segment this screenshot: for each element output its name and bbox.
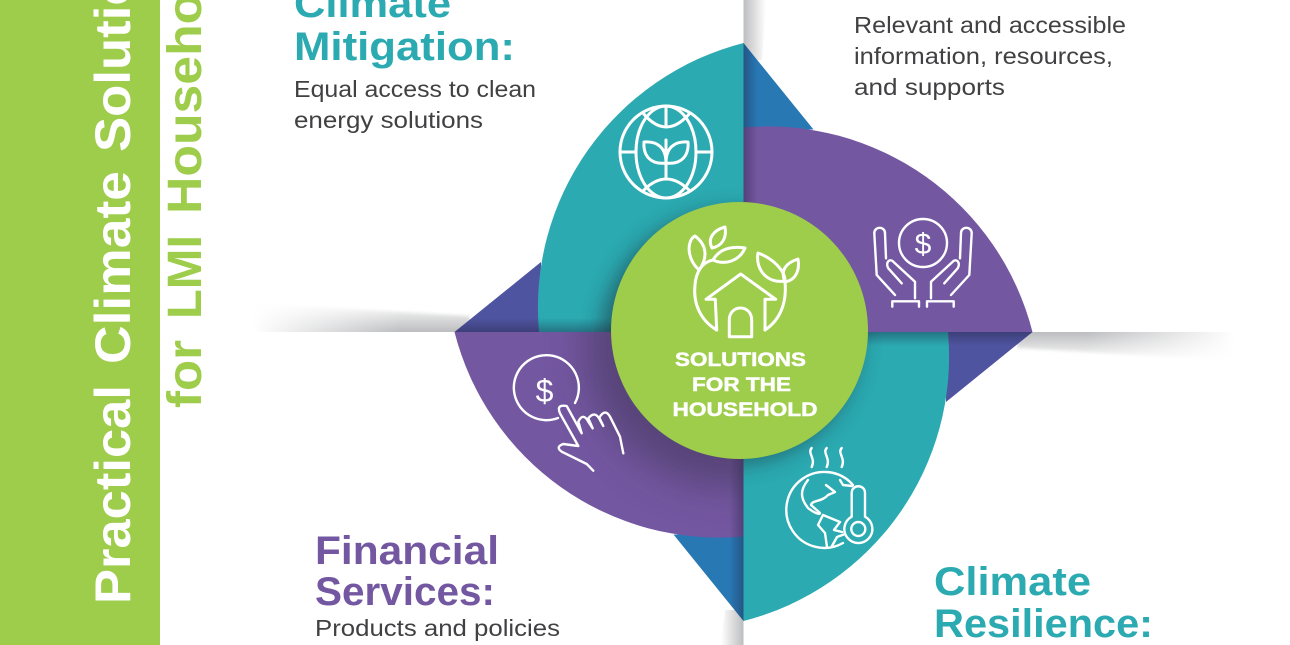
text block: information and supports: and supports	[854, 74, 1005, 100]
text block: climate mitigation	[294, 0, 536, 133]
text block: financial services: Products and policies	[315, 615, 560, 641]
text block: climate resilience: Climate	[934, 560, 1091, 604]
triangle: blue bottom	[674, 534, 744, 621]
pinwheel: blades and triangles	[454, 42, 1033, 622]
blade: purple top right	[744, 126, 1032, 332]
icon: hands holding coin: $	[915, 228, 932, 261]
subtitle: for LMI households	[159, 0, 212, 408]
icon: globe with sprout	[620, 106, 712, 198]
center label: FOR THE	[692, 374, 791, 396]
icon: house with leaves	[689, 227, 798, 337]
fold shadows	[250, 0, 1237, 645]
text block: climate mitigation: Mitigation:	[294, 25, 515, 69]
blade edge shading	[454, 42, 1033, 622]
text block: information and supports: Relevant and accessible	[854, 12, 1126, 38]
title: practical climate solutions: Climate	[85, 171, 141, 364]
blade: teal climate mitigation	[538, 43, 744, 332]
center label	[672, 349, 818, 421]
triangle: blue top	[744, 43, 814, 130]
triangle: indigo right	[946, 332, 1032, 402]
panel: green title band	[0, 0, 160, 645]
text block: financial services: Services:	[315, 570, 495, 614]
text block: information and supports	[854, 12, 1126, 100]
center label: HOUSEHOLD	[672, 399, 818, 421]
title: practical climate solutions	[85, 0, 141, 604]
text block: climate mitigation: Equal access to clean	[294, 76, 536, 102]
blade: purple financial services	[454, 332, 744, 538]
center circle	[611, 202, 868, 459]
text block: information and supports: information, resources,	[854, 43, 1113, 69]
text block: climate resilience	[934, 560, 1153, 645]
subtitle: for LMI households: LMI	[159, 235, 212, 319]
icon: dollar coin with pointing hand: $	[536, 373, 554, 409]
icon: dollar coin with pointing hand	[514, 355, 623, 471]
text block: climate mitigation: energy solutions	[294, 107, 483, 133]
title: practical climate solutions: Practical	[85, 385, 141, 604]
center label: SOLUTIONS	[675, 349, 806, 371]
icon: hands holding coin	[874, 219, 972, 307]
circle cast shadows	[586, 203, 870, 487]
text block: financial services	[315, 529, 560, 641]
text block: financial services: Financial	[315, 529, 499, 573]
triangle: indigo left	[454, 262, 541, 332]
icon: earth with thermometer	[786, 448, 872, 548]
blade: teal climate resilience	[744, 332, 949, 621]
text block: climate resilience: Resilience:	[934, 602, 1153, 645]
subtitle: for LMI households: for	[159, 340, 212, 408]
